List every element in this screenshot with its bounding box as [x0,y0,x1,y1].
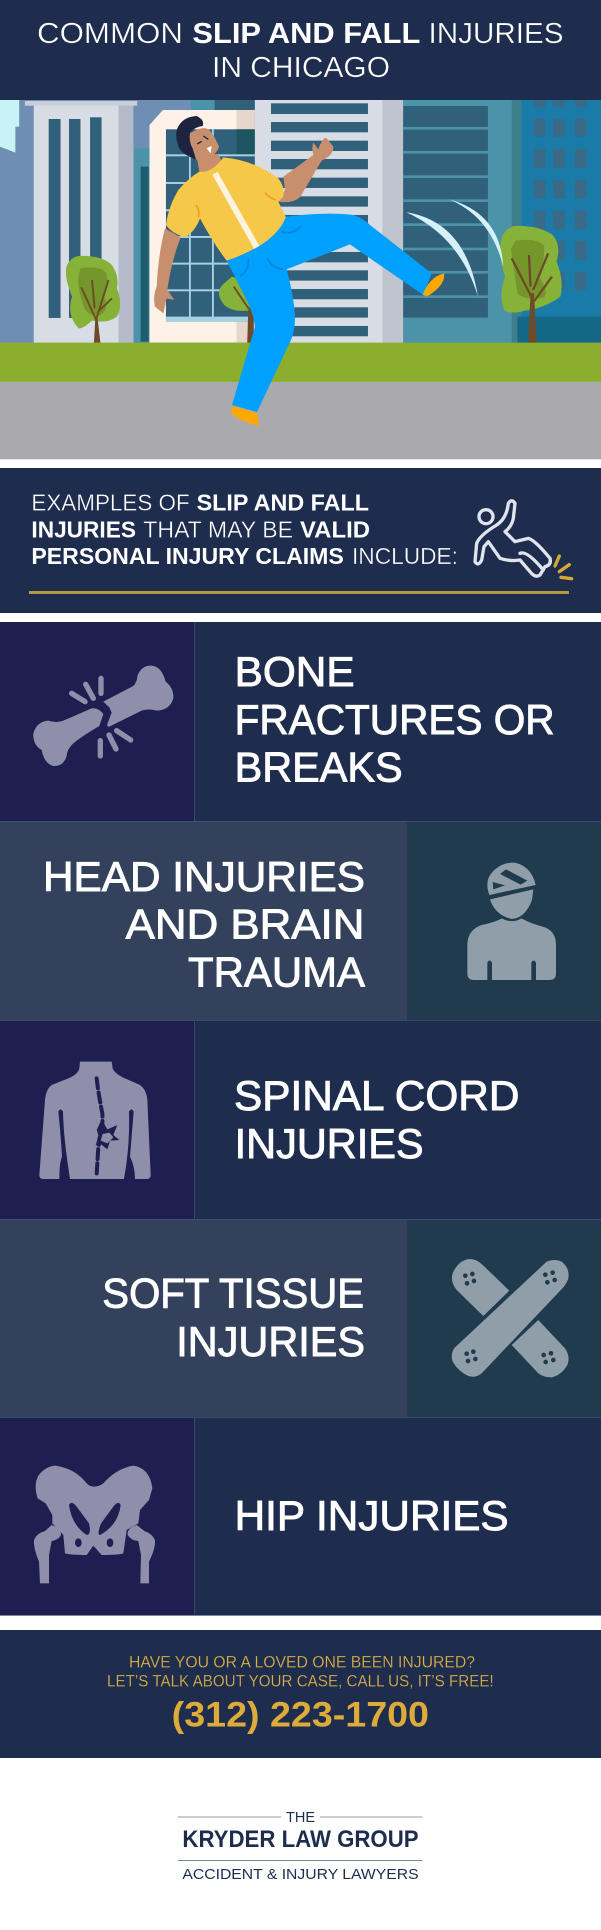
logo: The Kryder Law Group: ACCIDENT & INJURY LAWYERS [182,1866,419,1883]
icon: middle tree [219,277,254,343]
label: spinal cord [234,1072,519,1167]
label: spinal cord: SPINAL CORD [234,1072,519,1119]
icon: left tree [66,256,120,343]
title: SLIP AND FALL [192,18,420,50]
row: head injuries [0,821,601,1020]
panel: header [0,0,601,100]
intro text: THAT MAY BE [143,516,293,542]
icon: slipping figure [475,501,550,576]
label: head injuries: TRAUMA [188,949,365,996]
label: soft tissue: SOFT TISSUE [102,1270,364,1317]
intro text: EXAMPLES OF [31,490,190,516]
label: bone fractures: BREAKS [235,744,403,791]
intro text [31,490,458,569]
intro text: VALID [300,516,370,542]
gold divider [29,591,569,594]
label: hip injuries: HIP INJURIES [235,1492,509,1539]
panel: call to action [0,1630,601,1758]
title: IN CHICAGO [212,52,390,84]
title [37,18,564,84]
label: head injuries [43,853,365,996]
label: bone fractures: FRACTURES OR [235,696,555,743]
logo: The Kryder Law Group: KRYDER LAW GROUP [182,1826,419,1853]
logo: The Kryder Law Group: THE [286,1810,315,1826]
label: head injuries: HEAD INJURIES [43,853,365,900]
icon: bandaged head [467,863,556,980]
call to action text [107,1652,494,1690]
label: head injuries: AND BRAIN [126,901,364,948]
icon: pelvis [34,1466,155,1583]
panel: intro [0,468,601,613]
intro text: INJURIES [31,516,136,542]
label: soft tissue: INJURIES [176,1318,365,1365]
phone number: (312) 223-1700 [172,1696,429,1735]
label: bone fractures [235,648,555,791]
label: spinal cord: INJURIES [235,1120,424,1167]
title: INJURIES [428,18,564,50]
label: bone fractures: BONE [235,648,355,695]
row: hip injuries [0,1417,601,1616]
row: bone fractures [0,622,601,821]
label: soft tissue [102,1270,365,1365]
icon: broken bone [33,666,173,766]
logo: The Kryder Law Group [178,1810,422,1883]
intro text: PERSONAL INJURY CLAIMS [31,543,344,569]
icon: back with injured spine [39,1062,151,1179]
call to action text: LET’S TALK ABOUT YOUR CASE, CALL US, IT’S FREE! [107,1672,494,1690]
intro text: SLIP AND FALL [197,490,369,516]
figure: falling man [154,116,444,426]
call to action text: HAVE YOU OR A LOVED ONE BEEN INJURED? [129,1652,475,1672]
row: soft tissue [0,1219,601,1417]
icon: right tree [500,226,562,343]
row: spinal cord [0,1020,601,1219]
title: COMMON [37,18,183,50]
illustration: man slipping in front of city buildings [0,100,601,459]
icon: swoosh motion lines [406,199,503,297]
intro text: INCLUDE: [352,543,458,569]
icon: gold impact ticks [555,556,572,579]
icon: crossed bandages [452,1259,569,1377]
